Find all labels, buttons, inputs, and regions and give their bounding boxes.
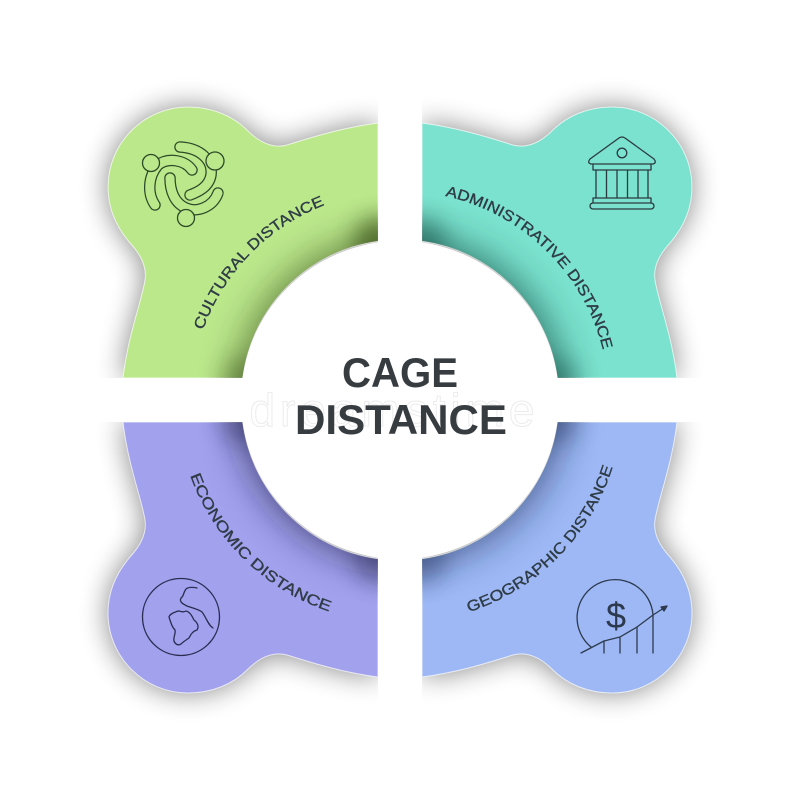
title: CAGE — [342, 349, 458, 396]
panel: administrative distance — [422, 88, 710, 378]
label: geographic distance: GEOGRAPHIC DISTANCE — [467, 464, 613, 611]
label: cultural distance: CULTURAL DISTANCE — [194, 196, 324, 328]
icon: people circle — [142, 147, 224, 226]
icon: globe — [142, 578, 220, 656]
panel: cultural distance — [90, 88, 378, 378]
panel: geographic distance — [422, 422, 710, 712]
label: economic distance: ECONOMIC DISTANCE — [190, 472, 332, 612]
title: DISTANCE — [295, 396, 507, 443]
watermark: dreamstime — [250, 384, 534, 436]
icon: dollar growth chart — [577, 580, 667, 653]
title — [295, 349, 507, 443]
center circle — [241, 241, 559, 559]
icon: bank building — [589, 137, 655, 209]
label: administrative distance: ADMINISTRATIVE DISTANCE — [444, 186, 613, 350]
icon: dollar growth chart: $ — [606, 595, 626, 636]
panel: economic distance — [90, 422, 378, 712]
